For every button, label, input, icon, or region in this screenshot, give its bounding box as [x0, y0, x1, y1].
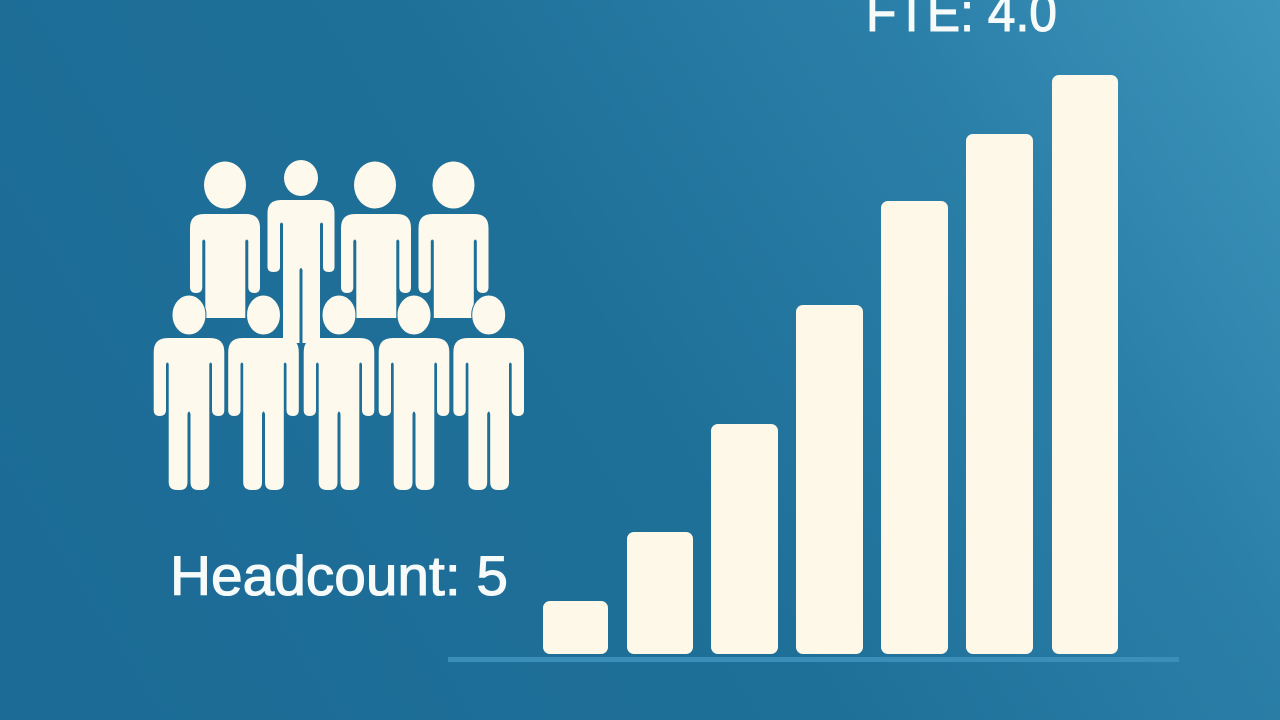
bar chart: FTE growth [448, 75, 1179, 662]
person: back row 4 [418, 162, 488, 318]
bar 1 [543, 601, 608, 654]
bar 3 [711, 424, 778, 654]
person: back row 2, standing taller [268, 160, 334, 343]
bar 7 [1052, 75, 1118, 654]
person: front row 4 [379, 295, 449, 490]
icon: group of people, headcount [154, 160, 524, 490]
bar 6 [966, 134, 1033, 654]
bar 4 [796, 305, 863, 654]
chart baseline [448, 657, 1179, 662]
bar 5 [881, 201, 948, 654]
person: front row 2 [228, 295, 299, 490]
person: front row 3 [304, 295, 374, 490]
person: front row 5 [453, 295, 524, 490]
bar 2 [627, 532, 693, 654]
label: headcount: Headcount: 5 [170, 544, 508, 607]
person: back row 3 [341, 162, 411, 318]
person: back row 1 [190, 162, 260, 318]
person: front row 1 [154, 295, 224, 490]
